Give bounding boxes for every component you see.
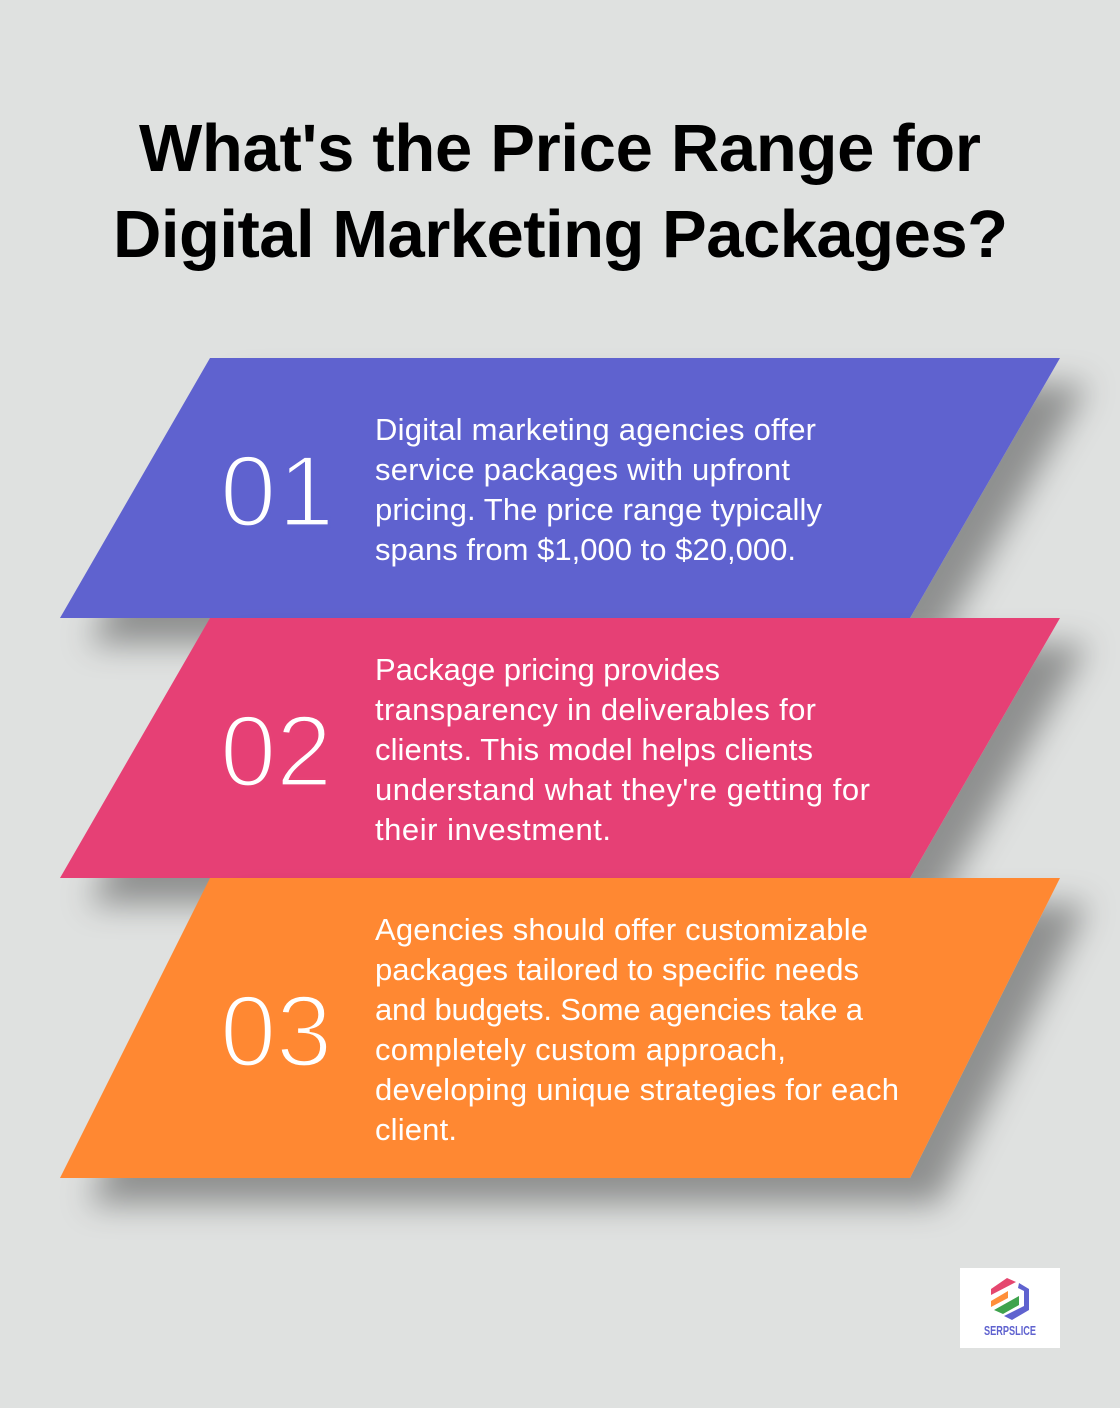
text block: step 01: [375, 412, 822, 567]
text block: step 01: pricing. The price range typically: [375, 492, 822, 527]
number 03: 03: [220, 976, 332, 1088]
logo: SerpSlice: [960, 1268, 1060, 1348]
text block: step 03: packages tailored to specific needs: [375, 952, 859, 987]
text block: step 02: understand what they're getting for: [375, 772, 870, 807]
text block: step 01: spans from $1,000 to $20,000.: [375, 532, 796, 567]
panel shape: blue parallelogram: [60, 358, 1060, 618]
text block: step 02: clients. This model helps clients: [375, 732, 813, 767]
text block: step 03: [375, 912, 899, 1147]
text block: step 01: Digital marketing agencies offer: [375, 412, 816, 447]
logo wordmark: SERPSLICE: [984, 1323, 1036, 1338]
panel: step 02: [60, 618, 1060, 878]
text block: step 03: and budgets. Some agencies take a: [375, 992, 864, 1027]
text block: step 02: Package pricing provides: [375, 652, 720, 687]
panel shape: pink parallelogram: [60, 618, 1060, 878]
panel: step 01: [60, 358, 1060, 618]
title: [113, 111, 1008, 272]
text block: step 02: their investment.: [375, 812, 611, 847]
text block: step 01: service packages with upfront: [375, 452, 790, 487]
text block: step 03: client.: [375, 1112, 457, 1147]
text block: step 03: Agencies should offer customizable: [375, 912, 868, 947]
icon: hexagon logo mark: [991, 1278, 1029, 1320]
number 01: 01: [220, 436, 334, 548]
title: What's the Price Range for: [139, 111, 981, 186]
title: Digital Marketing Packages?: [113, 197, 1008, 272]
text block: step 03: developing unique strategies for each: [375, 1072, 899, 1107]
text block: step 02: [375, 652, 870, 847]
number 02: 02: [220, 696, 332, 808]
panel: step 03: [60, 878, 1060, 1178]
text block: step 02: transparency in deliverables for: [375, 692, 816, 727]
panel shape: orange parallelogram: [60, 878, 1060, 1178]
text block: step 03: completely custom approach,: [375, 1032, 786, 1067]
